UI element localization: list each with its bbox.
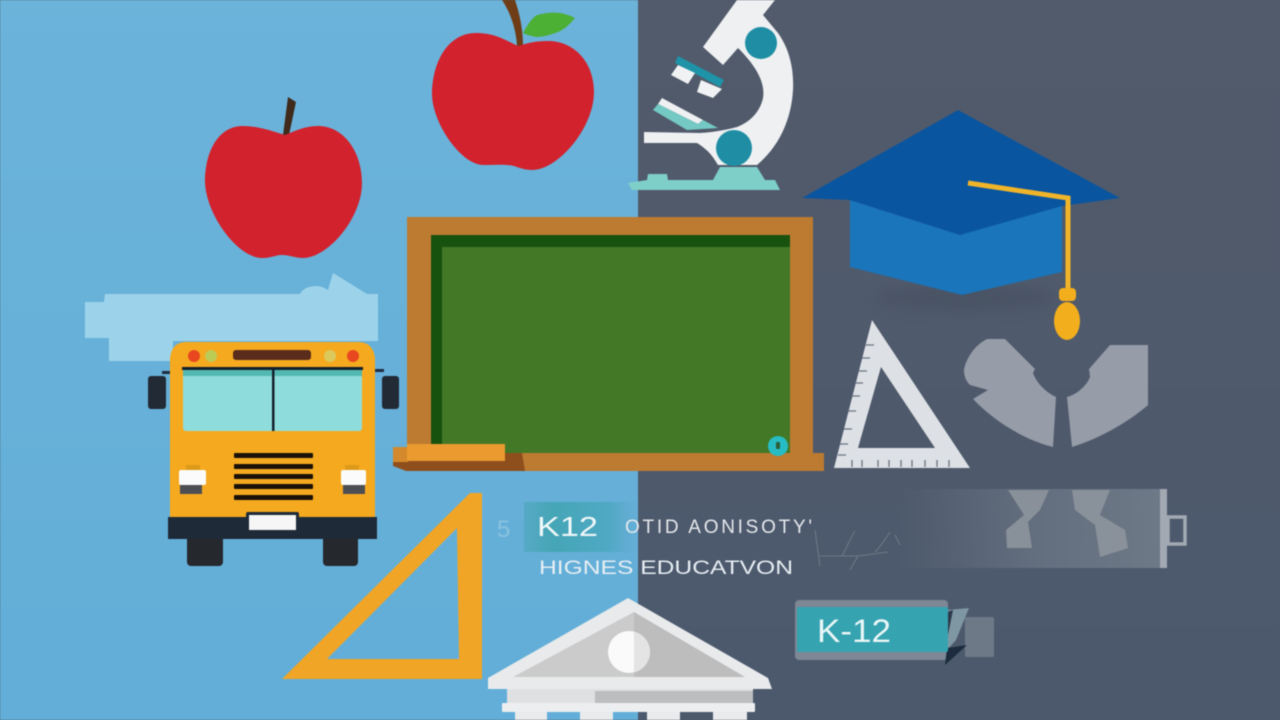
pediment inner right: [634, 612, 745, 677]
microscope knob upper: [745, 27, 777, 59]
pediment inner left: [513, 612, 634, 677]
bus licence plate: [246, 512, 299, 530]
cap shadow: [875, 286, 1055, 310]
bus mirrors: [148, 369, 399, 409]
microscope base: [628, 167, 780, 190]
icon: upper apple with leaf: [432, 0, 594, 170]
icon: light blue pencil banner: [85, 273, 378, 361]
chalk tray: [522, 453, 824, 471]
icon: lower left apple: [205, 97, 362, 258]
cap body: [850, 200, 1062, 295]
faded banner: right: [900, 489, 1185, 568]
background: left blue panel: [0, 0, 638, 720]
faded puzzle shapes: [1006, 490, 1128, 557]
eraser: [393, 444, 525, 471]
lower cornice: [502, 703, 755, 712]
label: higher education: HIGNES EDUCATVON: [539, 558, 793, 579]
badge label: K-12: [817, 613, 891, 649]
icon: white set square with ticks: [834, 320, 970, 468]
bus body: [170, 342, 375, 520]
icon: K-12 ribbon badge: [795, 600, 994, 665]
microscope knob lower: [716, 130, 752, 166]
building columns: [515, 711, 747, 720]
bus destination sign: [233, 350, 311, 360]
background: right slate panel: [638, 0, 1280, 720]
building pediment: [488, 598, 772, 689]
entablature shaded: [595, 691, 753, 703]
bus headlights: [179, 465, 366, 494]
label: K12: K12: [537, 511, 598, 542]
badge ribbon fold: [945, 608, 969, 665]
icon: microscope: [628, 0, 793, 190]
board inner shadow: [431, 235, 790, 445]
pediment circle: [608, 631, 650, 673]
microscope arm: [644, 0, 793, 165]
faint mark left of K12: 5: [497, 516, 510, 543]
entablature: [507, 689, 753, 703]
microscope slide: [653, 98, 718, 130]
icon: classical building: [488, 598, 772, 720]
icon: grey book shape: [964, 339, 1148, 447]
tassel: [968, 183, 1080, 340]
icon: orange set square: [282, 493, 482, 679]
faint sketch marks: [815, 530, 900, 570]
bus grille: [234, 453, 313, 500]
icon: graduation cap: [802, 110, 1120, 340]
bus bumper: [168, 517, 377, 539]
icon: school bus: [148, 342, 399, 566]
banner end strip: [1160, 489, 1167, 568]
badge faded square: [965, 617, 994, 657]
bus windshield: [182, 367, 363, 431]
badge back plate: [795, 600, 948, 660]
microscope objective: [671, 56, 724, 98]
board surface: [431, 235, 790, 455]
banner end cap: [1168, 517, 1185, 544]
icon: blackboard: [393, 217, 824, 471]
bus marker lights: [188, 350, 359, 362]
label background: K12: [524, 502, 637, 552]
badge teal plate: [797, 607, 948, 652]
bus wheels: [187, 535, 223, 566]
teal marker dot: [768, 436, 788, 456]
label: garbled line: OTID AONISOTY': [625, 517, 812, 538]
cap board: [802, 110, 1120, 235]
board frame: [407, 217, 813, 457]
